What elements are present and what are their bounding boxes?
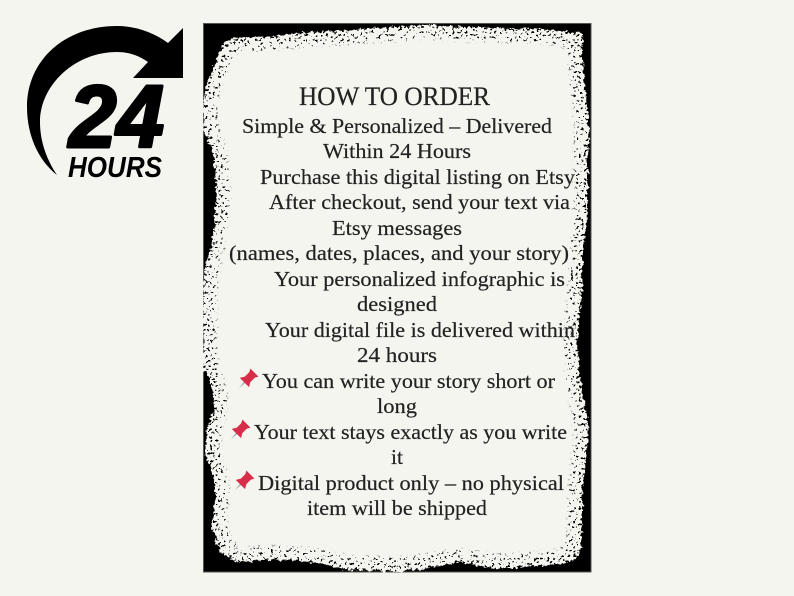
note: text unchanged: it [391,445,403,469]
step: purchase: Purchase this digital listing on Etsy [260,165,575,189]
step: delivery: 24 hours [357,343,437,367]
panel: distressed paper [203,25,589,572]
step: send text: (names, dates, places, and your story) [229,241,569,265]
icon: curved arrow [27,26,183,175]
icon: pushpin [235,369,258,392]
subtitle: Simple & Personalized – Delivered [242,114,552,138]
step: send text [229,190,570,265]
heading: HOW TO ORDER [299,82,491,111]
icon: 24 hours clock arrow [27,26,183,184]
note: text unchanged [227,420,567,469]
icon text: 24: 24 [67,67,164,166]
step: design: Your personalized infographic is [274,267,565,291]
note: digital only [231,471,564,520]
panel: how to order [203,24,591,572]
step: send text: Etsy messages [332,216,462,240]
subtitle [242,114,552,163]
step: delivery [265,318,575,367]
subtitle: Within 24 Hours [323,139,471,163]
panel frame [204,24,591,572]
note: story length: You can write your story short or [262,369,555,393]
note: digital only: item will be shipped [307,496,487,520]
note: digital only: Digital product only – no physical [258,471,564,495]
note: text unchanged: Your text stays exactly as you write [254,420,567,444]
step: design: designed [357,292,437,316]
note: story length [235,369,555,418]
icon text: HOURS: HOURS [68,152,163,184]
note: story length: long [377,394,417,418]
step: design [274,267,565,316]
step: send text: After checkout, send your text via [269,190,570,214]
icon: pushpin [231,471,254,494]
icon: pushpin [227,420,250,443]
step: delivery: Your digital file is delivered within [265,318,575,342]
